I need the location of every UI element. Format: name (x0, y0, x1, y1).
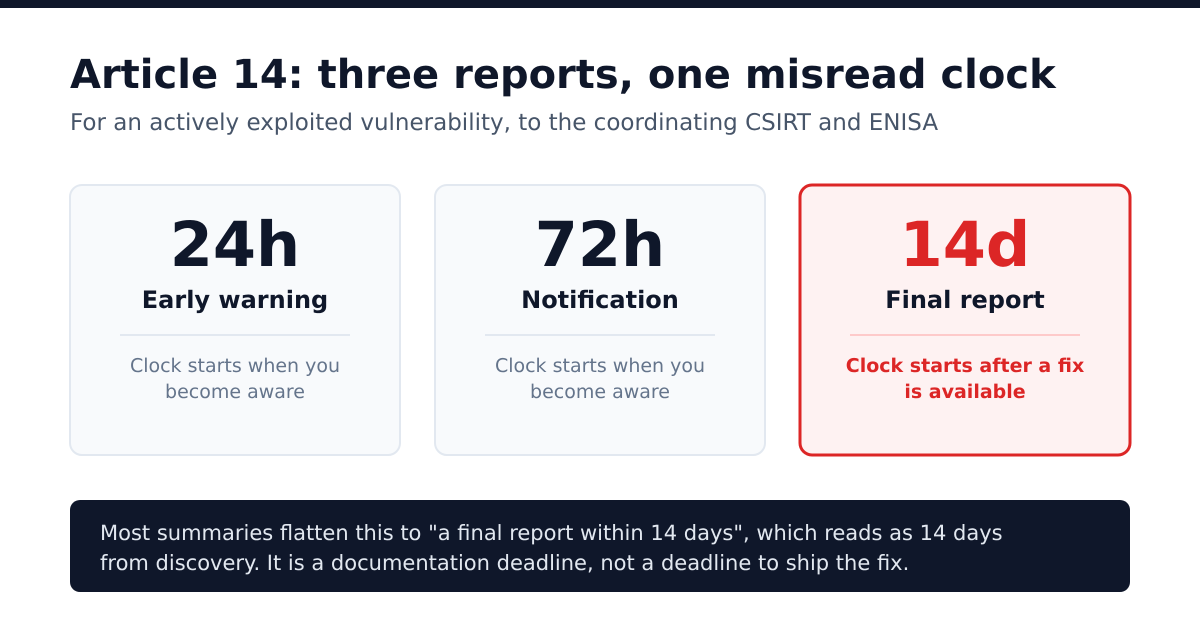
description: clock start: Clock starts when you (130, 355, 340, 377)
panel: 24h early warning (69, 184, 401, 456)
description: clock start after fix: Clock starts after a fix (846, 355, 1084, 377)
description: clock start: become aware (165, 381, 305, 403)
title: Article 14: three reports, one misread clock (70, 52, 1056, 98)
callout (70, 500, 1130, 592)
number: 72h: 72h (535, 208, 665, 281)
callout text (100, 521, 1003, 575)
description: clock start after fix: is available (904, 381, 1026, 403)
description: clock start after fix (846, 355, 1084, 403)
subtitle: For an actively exploited vulnerability, to the coordinating CSIRT and ENISA (70, 110, 938, 136)
description: clock start (495, 355, 705, 403)
number: 24h: 24h (170, 208, 300, 281)
top bar (0, 0, 1200, 8)
description: clock start (130, 355, 340, 403)
callout text: from discovery. It is a documentation deadline, not a deadline to ship the fix. (100, 551, 909, 575)
panel: 14d final report (798, 184, 1132, 456)
label: early warning: Early warning (142, 286, 328, 314)
panel: 72h notification (434, 184, 766, 456)
label: final report: Final report (885, 286, 1045, 314)
description: clock start: become aware (530, 381, 670, 403)
number: 14d: 14d (900, 208, 1030, 281)
label: notification: Notification (521, 286, 679, 314)
description: clock start: Clock starts when you (495, 355, 705, 377)
callout text: Most summaries flatten this to "a final report within 14 days", which reads as 14 days (100, 521, 1003, 545)
